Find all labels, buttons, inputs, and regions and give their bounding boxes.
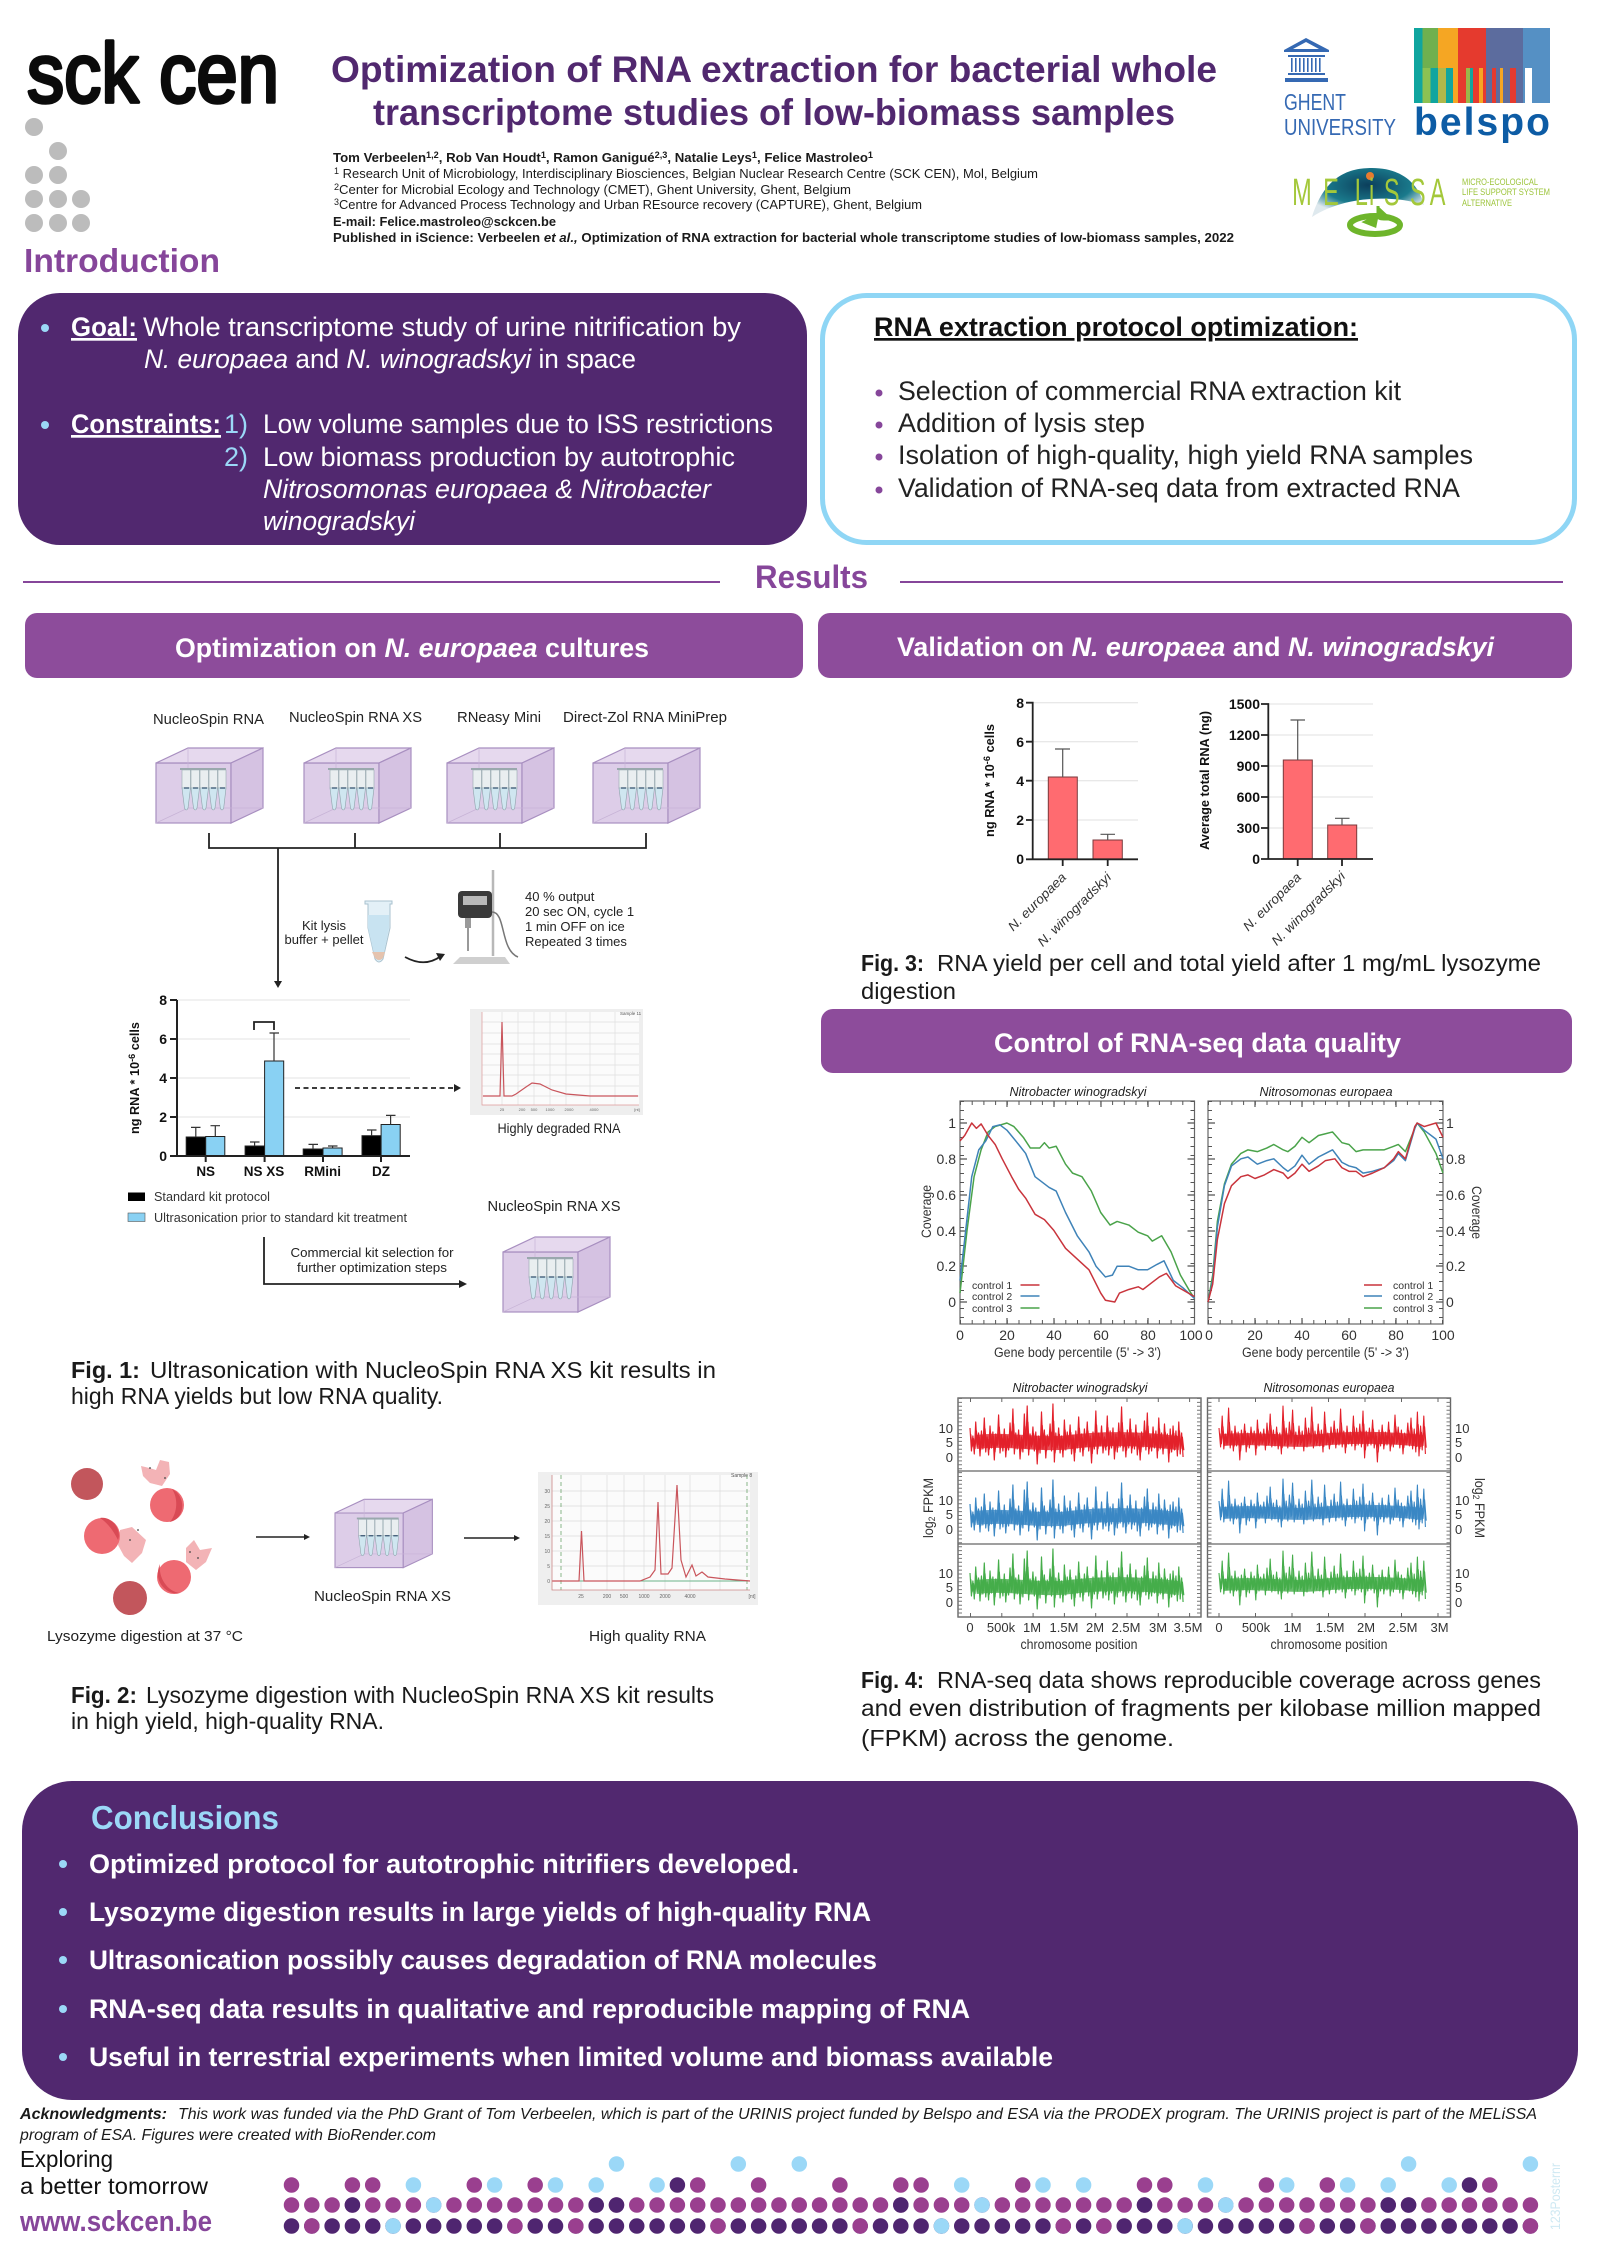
authors and affiliations: , Rob Van Houdt <box>439 150 542 165</box>
caption: Fig. 4: RNA-seq data shows reproducible coverage across genes <box>937 1667 1541 1693</box>
kit labels: NucleoSpin RNA <box>153 712 264 728</box>
bar chart: RNA per cell: cells <box>983 724 997 756</box>
electropherogram: high quality RNA: 15 <box>544 1534 550 1540</box>
constraints text: Constraints: <box>71 409 221 439</box>
panel: RNA extraction protocol optimization <box>822 296 1574 542</box>
caption: Fig. 2 <box>71 1682 714 1734</box>
authors and affiliations: 1 <box>868 150 873 160</box>
line chart: N. europaea FPKM: 5 <box>1455 1580 1462 1595</box>
line chart: N. europaea FPKM: 2 <box>1471 1495 1481 1499</box>
section header: Optimization on N. europaea cultures <box>25 613 803 678</box>
line chart: N. europaea FPKM: 0 <box>1455 1450 1462 1465</box>
line chart: N. winogradskyi FPKM: 0 <box>946 1595 953 1610</box>
line chart: N. winogradskyi coverage: 0.4 <box>937 1223 956 1239</box>
section header: Control of RNA-seq data quality <box>821 1009 1572 1073</box>
tagline: Exploring a better tomorrow: a better tomorrow <box>20 2173 208 2199</box>
bar chart: total RNA: 900 <box>1237 758 1260 774</box>
bar chart: kit yields: 6 <box>159 1031 167 1047</box>
constraints text <box>41 409 773 536</box>
bar chart: RNA per cell: N. europaea <box>1005 870 1069 934</box>
bar chart: kit yields: 4 <box>159 1070 167 1086</box>
title <box>331 49 1217 133</box>
caption: Fig. 1 <box>71 1357 716 1409</box>
bar chart: total RNA <box>1198 696 1373 948</box>
line chart: N. europaea FPKM: 10 <box>1455 1493 1469 1508</box>
logo: belspo <box>1414 28 1550 144</box>
electropherogram: degraded RNA: 4000 <box>590 1107 599 1112</box>
line chart: N. winogradskyi FPKM: 2 <box>927 1517 937 1521</box>
constraints text: 2) <box>224 442 248 472</box>
chart legend: Ultrasonication prior to standard kit treatment <box>154 1211 408 1225</box>
authors and affiliations <box>333 150 1234 245</box>
line chart: N. winogradskyi FPKM: 10 <box>939 1566 953 1581</box>
caption: Fig. 2: Fig. 2: <box>71 1682 137 1708</box>
authors and affiliations: E-mail: Felice.mastroleo@sckcen.be <box>333 214 556 229</box>
line chart: N. europaea coverage: Coverage <box>1469 1186 1484 1239</box>
authors and affiliations: 3 <box>334 197 339 207</box>
chart legend <box>128 1190 408 1225</box>
bullet markers <box>59 1860 67 2061</box>
caption: Fig. 1: Fig. 1: <box>71 1357 140 1383</box>
title: Optimization of RNA extraction for bacterial whole <box>331 49 1217 90</box>
line chart: N. winogradskyi FPKM: 1.5M <box>1050 1620 1078 1635</box>
line chart: N. winogradskyi FPKM: 3.5M <box>1174 1620 1202 1635</box>
logo: MELiSSA <box>1292 168 1550 234</box>
line chart: N. winogradskyi coverage: 0.6 <box>937 1187 956 1203</box>
authors and affiliations: , Ramon Ganigué <box>546 150 655 165</box>
caption: Fig. 1: Ultrasonication with NucleoSpin RNA XS kit results in <box>150 1357 716 1383</box>
figure 2 labels: NucleoSpin RNA XS <box>314 1589 451 1605</box>
line chart: N. europaea FPKM: 0 <box>1455 1522 1462 1537</box>
bar chart: RNA per cell <box>982 695 1138 949</box>
line chart: N. europaea FPKM: 10 <box>1455 1566 1469 1581</box>
goal text: Whole transcriptome study of urine nitrification by <box>143 312 741 342</box>
tagline: Exploring a better tomorrow: Exploring <box>20 2146 113 2172</box>
authors and affiliations: Centre for Advanced Process Technology and Urban REsource recovery (CAPTURE), Ghent, Belgium <box>339 197 922 212</box>
line chart: N. europaea FPKM <box>1208 1380 1487 1652</box>
sonication settings: 40 % output <box>525 889 595 904</box>
electropherogram: high quality RNA: 200 <box>603 1594 611 1600</box>
line chart: N. europaea coverage: Gene body percentile (5' -> 3') <box>1242 1345 1409 1360</box>
logo: Ghent University: GHENT <box>1284 89 1346 115</box>
authors and affiliations: , Felice Mastroleo <box>757 150 868 165</box>
authors and affiliations: Research Unit of Microbiology, Interdisciplinary Biosciences, Belgian Nuclear Research Centre (SCK CEN), Mol, Belgium <box>339 166 1038 181</box>
bar chart: RNA per cell: -6 <box>982 756 992 764</box>
decorative dot band <box>292 2164 1531 2226</box>
website: www.sckcen.be <box>19 2206 212 2238</box>
authors and affiliations: Tom Verbeelen <box>333 150 425 165</box>
line chart: N. europaea FPKM: 1.5M <box>1316 1620 1344 1635</box>
acknowledgments: This work was funded via the PhD Grant of Tom Verbeelen, which is part of the URINIS project funded by Belspo and ESA via the PRODEX program. The URINIS project is part of the MELiSSA <box>178 2106 1537 2123</box>
line chart: N. winogradskyi FPKM: 0 <box>966 1620 974 1635</box>
bar chart: kit yields: NS XS <box>244 1164 284 1179</box>
bar chart: RNA per cell: 8 <box>1016 695 1024 711</box>
line chart: N. winogradskyi FPKM: 3M <box>1149 1620 1167 1635</box>
arrow: kits to chart <box>209 833 646 988</box>
line chart: N. europaea FPKM: 500k <box>1242 1620 1271 1635</box>
line chart: N. winogradskyi FPKM: 0 <box>946 1522 953 1537</box>
line chart: N. europaea FPKM: 5 <box>1455 1507 1462 1522</box>
kit labels: NucleoSpin RNA XS <box>289 710 422 726</box>
figure 1: kit selection workflow <box>127 710 727 1312</box>
line chart: N. winogradskyi FPKM: 1M <box>1023 1620 1041 1635</box>
line chart: N. europaea coverage: 60 <box>1341 1327 1357 1343</box>
bar chart: total RNA: N. winogradskyi <box>1268 868 1349 948</box>
line chart: N. winogradskyi coverage: 60 <box>1093 1327 1109 1343</box>
electropherogram: degraded RNA: Sample 11 <box>620 1011 642 1016</box>
electropherogram: degraded RNA: 2000 <box>565 1107 574 1112</box>
logo: sck cen: sck cen <box>27 26 279 120</box>
bar chart: total RNA: N. europaea <box>1240 870 1304 934</box>
acknowledgments: program of ESA. Figures were created with BioRender.com <box>19 2127 436 2144</box>
section header: Validation <box>818 613 1572 678</box>
logo: MELiSSA: LIFE SUPPORT SYSTEM <box>1462 187 1550 198</box>
bar chart: total RNA: 0 <box>1252 851 1260 867</box>
line chart: N. europaea coverage: 80 <box>1388 1327 1404 1343</box>
icon: grey dot cluster <box>25 118 90 232</box>
panel: goal and constraints <box>18 293 807 545</box>
line chart: N. winogradskyi FPKM: 0 <box>946 1450 953 1465</box>
line chart: N. winogradskyi coverage: 0 <box>948 1294 956 1310</box>
line chart: N. winogradskyi coverage: 0 <box>956 1327 964 1343</box>
authors and affiliations: Center for Microbial Ecology and Technology (CMET), Ghent University, Ghent, Belgium <box>339 182 851 197</box>
conclusion list: Useful in terrestrial experiments when limited volume and biomass available <box>89 2042 1053 2072</box>
caption: Fig. 4 <box>861 1667 1541 1751</box>
caption: Fig. 3: Fig. 3: <box>861 950 924 976</box>
caption: Fig. 3: digestion <box>861 978 956 1004</box>
caption: highly degraded RNA: Highly degraded RNA <box>498 1120 621 1136</box>
electropherogram: high quality RNA: 20 <box>544 1519 550 1525</box>
line chart: N. winogradskyi FPKM: 500k <box>987 1620 1016 1635</box>
line chart: N. winogradskyi coverage: 1 <box>948 1115 956 1131</box>
sonication settings: 1 min OFF on ice <box>525 919 625 934</box>
line chart: N. europaea FPKM: 0 <box>1455 1595 1462 1610</box>
line chart: N. europaea FPKM: log <box>1472 1478 1487 1496</box>
tube with lysis buffer: Kit lysis <box>302 918 347 933</box>
line chart: N. europaea coverage: control 1 <box>1393 1280 1433 1292</box>
electropherogram: high quality RNA: 30 <box>544 1489 550 1495</box>
electropherogram: high quality RNA: 25 <box>544 1504 550 1510</box>
caption: Fig. 4: Fig. 4: <box>861 1667 924 1693</box>
line chart: N. europaea coverage: 0.6 <box>1446 1187 1466 1203</box>
conclusion list: Ultrasonication possibly causes degradation of RNA molecules <box>89 1945 877 1975</box>
icon: sonicator <box>453 870 518 964</box>
panel: RNA extraction protocol optimization: Selection of commercial RNA extraction kit <box>898 376 1401 406</box>
watermark: 123Posternr: 123Posternr <box>1547 2163 1563 2230</box>
authors and affiliations: 1,2 <box>426 150 439 160</box>
bar chart: kit yields <box>127 992 410 1179</box>
constraints text: Low volume samples due to ISS restrictions <box>263 409 773 439</box>
line chart: N. winogradskyi coverage: Nitrobacter winogradskyi <box>1010 1084 1148 1099</box>
line chart: N. europaea FPKM: 5 <box>1455 1435 1462 1450</box>
line chart: N. winogradskyi coverage <box>919 1084 1203 1360</box>
line chart: N. europaea FPKM: 10 <box>1455 1421 1469 1436</box>
line chart: N. europaea FPKM: Nitrosomonas europaea <box>1264 1380 1394 1395</box>
bar chart: RNA per cell: 2 <box>1016 812 1024 828</box>
line chart: N. winogradskyi FPKM: FPKM <box>921 1478 936 1517</box>
authors and affiliations: 1 <box>334 166 339 176</box>
caption: Fig. 1: high RNA yields but low RNA quality. <box>71 1383 443 1409</box>
arrow: kit to trace <box>464 1535 520 1541</box>
panel: RNA extraction protocol optimization: Isolation of high-quality, high yield RNA samples <box>898 440 1473 470</box>
electropherogram: high quality RNA: [nt] <box>749 1594 756 1600</box>
line chart: N. europaea FPKM: FPKM <box>1472 1499 1487 1538</box>
line chart: N. europaea coverage: 0.4 <box>1446 1223 1466 1239</box>
goal text <box>41 312 741 374</box>
acknowledgments: Acknowledgments: <box>19 2106 167 2123</box>
heading: Conclusions: Conclusions <box>91 1799 279 1836</box>
electropherogram: high quality RNA: 25 <box>578 1594 584 1600</box>
line chart: N. europaea coverage: 100 <box>1431 1327 1455 1343</box>
line chart: N. europaea coverage: 1 <box>1446 1115 1454 1131</box>
bar chart: total RNA: 600 <box>1237 789 1260 805</box>
arrow: kit selection: Commercial kit selection for <box>290 1246 454 1260</box>
arrow: kit selection: further optimization steps <box>297 1261 447 1275</box>
line chart: N. europaea coverage: 0.2 <box>1446 1258 1466 1274</box>
bar chart: total RNA: 1200 <box>1229 727 1260 743</box>
panel: RNA extraction protocol optimization: RNA extraction protocol optimization: <box>874 312 1358 342</box>
line chart: N. europaea coverage: 0 <box>1446 1294 1454 1310</box>
line chart: N. winogradskyi coverage: 20 <box>999 1327 1015 1343</box>
line chart: N. europaea coverage: 0 <box>1205 1327 1213 1343</box>
bar chart: kit yields: cells <box>128 1022 142 1054</box>
bar chart: kit yields: 0 <box>159 1148 167 1164</box>
panel: RNA extraction protocol optimization: Validation of RNA-seq data from extracted RNA <box>898 473 1460 503</box>
line chart: N. europaea FPKM: 2.5M <box>1389 1620 1417 1635</box>
line chart: N. winogradskyi FPKM: 5 <box>946 1507 953 1522</box>
line chart: N. europaea coverage <box>1205 1084 1484 1360</box>
authors and affiliations: Published in iScience: Verbeelen et al., Optimization of RNA extraction for bacterial whole transcriptome studies of low-biomass samples, 2022 <box>333 230 1234 245</box>
chart legend: Standard kit protocol <box>154 1190 270 1204</box>
caption: Fig. 4: and even distribution of fragments per kilobase million mapped <box>861 1695 1541 1721</box>
panel: conclusions <box>22 1781 1578 2100</box>
section header: Validation: Validation on N. europaea and N. winogradskyi <box>897 632 1494 662</box>
line chart: N. winogradskyi coverage: 0.2 <box>937 1258 956 1274</box>
acknowledgments <box>19 2106 1537 2144</box>
conclusion list: Optimized protocol for autotrophic nitrifiers developed. <box>89 1849 799 1879</box>
bar chart: total RNA: Average total RNA (ng) <box>1198 711 1212 850</box>
line chart: N. winogradskyi coverage: control 2 <box>972 1291 1012 1303</box>
line chart: N. winogradskyi coverage: control 3 <box>972 1303 1012 1315</box>
electropherogram: high quality RNA: 5 <box>547 1564 550 1570</box>
caption: Fig. 2: Lysozyme digestion with NucleoSpin RNA XS kit results <box>146 1682 714 1708</box>
electropherogram: degraded RNA: [nt] <box>634 1107 640 1112</box>
constraints text: Low biomass production by autotrophic <box>263 442 735 472</box>
selected kit label: NucleoSpin RNA XS <box>488 1199 620 1215</box>
line chart: N. europaea coverage: 20 <box>1247 1327 1263 1343</box>
line chart: N. winogradskyi FPKM: 5 <box>946 1435 953 1450</box>
selected kit box <box>503 1237 610 1312</box>
logo: Ghent University <box>1284 38 1396 140</box>
line chart: N. europaea FPKM: 3M <box>1430 1620 1449 1635</box>
section header: Optimization on N. europaea cultures: Optimization on N. europaea cultures <box>175 633 649 663</box>
line chart: N. europaea FPKM: 0 <box>1215 1620 1223 1635</box>
electropherogram: high quality RNA: 500 <box>620 1594 628 1600</box>
electropherogram: high quality RNA: 10 <box>544 1549 550 1555</box>
arrow: kit selection <box>264 1237 467 1288</box>
electropherogram: degraded RNA: 500 <box>531 1107 538 1112</box>
authors and affiliations: 1 <box>752 150 757 160</box>
icon: bacterial cells <box>71 1460 212 1615</box>
line chart: N. winogradskyi FPKM: 10 <box>939 1421 953 1436</box>
section header: Control of RNA-seq data quality: Control of RNA-seq data quality <box>994 1028 1401 1058</box>
bar chart: kit yields: RMini <box>304 1164 341 1179</box>
line chart: N. winogradskyi coverage: 0.8 <box>937 1151 956 1167</box>
line chart: N. winogradskyi FPKM: 2.5M <box>1112 1620 1140 1635</box>
line chart: N. winogradskyi coverage: 40 <box>1046 1327 1062 1343</box>
caption: Fig. 3: RNA yield per cell and total yield after 1 mg/mL lysozyme <box>937 950 1541 976</box>
logo: Ghent University: UNIVERSITY <box>1284 114 1396 140</box>
line chart: N. winogradskyi coverage: 80 <box>1140 1327 1156 1343</box>
caption: Fig. 2: in high yield, high-quality RNA. <box>71 1708 384 1734</box>
line chart: N. winogradskyi FPKM: 2M <box>1086 1620 1104 1635</box>
electropherogram: high quality RNA: Sample 8 <box>731 1473 752 1479</box>
line chart: N. winogradskyi FPKM: Nitrobacter winogradskyi <box>1012 1380 1149 1395</box>
bar chart: kit yields: 8 <box>159 992 167 1008</box>
caption: Fig. 3 <box>861 950 1541 1004</box>
bar chart: kit yields: ng RNA * 10 <box>128 1063 142 1134</box>
logo: belspo: belspo <box>1414 101 1550 144</box>
line chart: N. winogradskyi FPKM: log <box>921 1520 936 1538</box>
panel: RNA extraction protocol optimization: Addition of lysis step <box>898 408 1145 438</box>
logo: MELiSSA: MICRO-ECOLOGICAL <box>1462 177 1538 188</box>
line chart: N. winogradskyi coverage: Gene body percentile (5' -> 3') <box>994 1345 1161 1360</box>
title: transcriptome studies of low-biomass samples <box>373 92 1175 133</box>
constraints text: winogradskyi <box>263 506 416 536</box>
line chart: N. winogradskyi coverage: 100 <box>1179 1327 1203 1343</box>
line chart: N. winogradskyi FPKM: 10 <box>939 1493 953 1508</box>
goal text: Goal: <box>71 312 137 342</box>
logo: MELiSSA: MELiSSA <box>1292 170 1446 213</box>
bar chart: RNA per cell: 0 <box>1016 851 1024 867</box>
line chart: N. europaea coverage: control 3 <box>1393 1303 1433 1315</box>
bar chart: kit yields: NS <box>196 1164 215 1179</box>
line chart: N. europaea coverage: 0.8 <box>1446 1151 1466 1167</box>
kit labels <box>153 710 727 728</box>
bar chart: total RNA: 1500 <box>1229 696 1260 712</box>
logo: MELiSSA: ALTERNATIVE <box>1462 198 1512 209</box>
constraints text: 1) <box>224 409 248 439</box>
bar chart: RNA per cell: 6 <box>1016 734 1024 750</box>
conclusion list: Lysozyme digestion results in large yields of high-quality RNA <box>89 1897 871 1927</box>
tube with lysis buffer: buffer + pellet <box>285 932 364 947</box>
electropherogram: degraded RNA: 200 <box>519 1107 526 1112</box>
line chart: N. europaea FPKM: 1M <box>1283 1620 1302 1635</box>
line chart: N. europaea coverage: Nitrosomonas europaea <box>1260 1084 1392 1099</box>
electropherogram: high quality RNA: 1000 <box>638 1594 650 1600</box>
line chart: N. europaea FPKM: 2M <box>1357 1620 1375 1635</box>
kit box <box>335 1499 432 1568</box>
figure 2 labels <box>47 1589 706 1645</box>
heading: Introduction: Introduction <box>24 242 220 279</box>
tagline: Exploring a better tomorrow <box>20 2146 208 2199</box>
kit labels: RNeasy Mini <box>457 710 541 726</box>
bar chart: kit yields: 2 <box>159 1109 167 1125</box>
line chart: N. winogradskyi FPKM: chromosome position <box>1020 1637 1138 1652</box>
authors and affiliations: 2 <box>334 182 339 192</box>
figure 2: lysozyme workflow <box>47 1460 758 1645</box>
authors and affiliations: 2,3 <box>655 150 667 160</box>
line chart: N. europaea coverage: 40 <box>1294 1327 1310 1343</box>
kit labels: Direct-Zol RNA MiniPrep <box>563 710 727 726</box>
electropherogram: high quality RNA: 4000 <box>684 1594 696 1600</box>
bar chart: kit yields: -6 <box>127 1054 137 1062</box>
conclusion list <box>89 1849 1053 2072</box>
sonication settings: 20 sec ON, cycle 1 <box>525 904 634 919</box>
electropherogram: degraded RNA <box>470 1009 643 1115</box>
authors and affiliations: , Natalie Leys <box>667 150 752 165</box>
line chart: N. winogradskyi FPKM <box>921 1380 1202 1652</box>
sonication settings <box>525 889 634 949</box>
dashed arrow to degraded trace <box>295 1084 461 1092</box>
bar chart: total RNA: 300 <box>1237 820 1260 836</box>
line chart: N. europaea FPKM: chromosome position <box>1270 1637 1388 1652</box>
electropherogram: high quality RNA: 2000 <box>659 1594 671 1600</box>
conclusion list: RNA-seq data results in qualitative and reproducible mapping of RNA <box>89 1994 970 2024</box>
heading: Results: Results <box>755 559 868 595</box>
authors and affiliations: 1 <box>541 150 546 160</box>
figure 2 labels: Lysozyme digestion at 37 °C <box>47 1629 243 1645</box>
bar chart: RNA per cell: 4 <box>1016 773 1024 789</box>
electropherogram: high quality RNA <box>538 1472 758 1605</box>
tube with lysis buffer <box>285 901 392 962</box>
caption: Fig. 4: (FPKM) across the genome. <box>861 1725 1174 1751</box>
arrow: digestion to kit <box>256 1534 310 1540</box>
sonication settings: Repeated 3 times <box>525 934 627 949</box>
electropherogram: high quality RNA: 0 <box>547 1579 550 1585</box>
line chart: N. winogradskyi FPKM: 5 <box>946 1580 953 1595</box>
kit boxes <box>156 748 700 823</box>
constraints text: Nitrosomonas europaea & Nitrobacter <box>263 474 712 504</box>
line chart: N. winogradskyi coverage: control 1 <box>972 1280 1012 1292</box>
goal text: N. europaea and N. winogradskyi in space <box>144 344 636 374</box>
bar chart: RNA per cell: ng RNA * 10 <box>983 766 997 837</box>
figure 2 labels: High quality RNA <box>589 1629 706 1645</box>
electropherogram: degraded RNA: 25 <box>500 1107 505 1112</box>
bar chart: RNA per cell: N. winogradskyi <box>1034 869 1115 949</box>
line chart: N. winogradskyi coverage: Coverage <box>919 1185 934 1238</box>
arrow: tube to sonicator <box>405 953 445 962</box>
electropherogram: degraded RNA: 1000 <box>546 1107 555 1112</box>
line chart: N. europaea coverage: control 2 <box>1393 1291 1433 1303</box>
bar chart: kit yields: DZ <box>372 1164 390 1179</box>
